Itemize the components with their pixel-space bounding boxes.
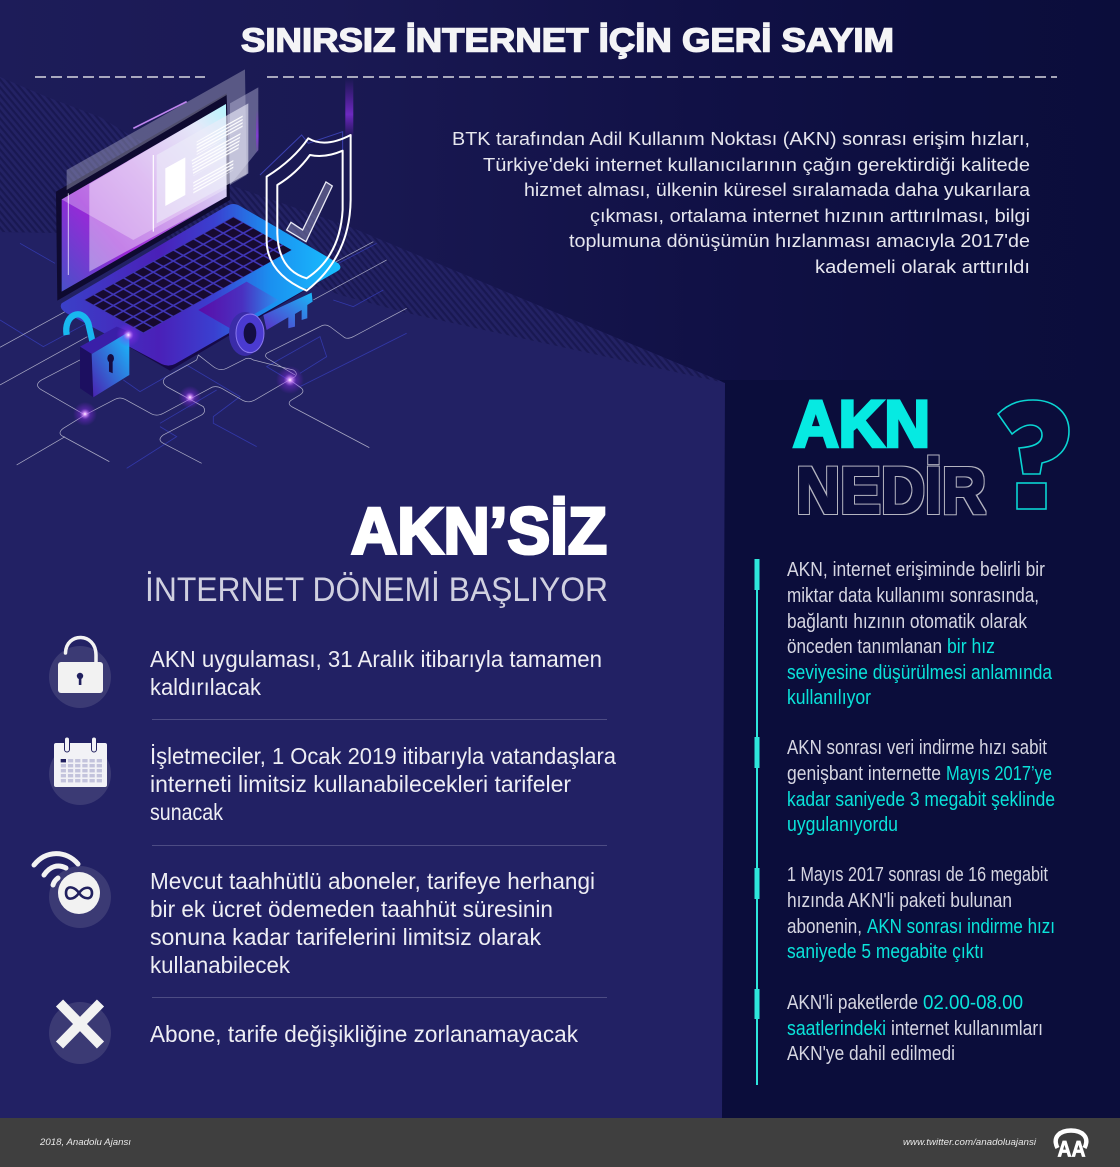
list item 1: kaldırılacak [150, 674, 261, 700]
text block: definition: bir hız [947, 636, 995, 658]
icon: padlock [49, 637, 111, 708]
heading: AKN'siz [145, 494, 608, 609]
intro paragraph: kademeli olarak arttırıldı [815, 256, 1030, 277]
list item 2 [150, 743, 616, 825]
icon: wifi with infinity [34, 854, 111, 928]
shield [260, 78, 353, 291]
list item 2: interneti limitsiz kullanabilecekleri tarifeler [150, 771, 571, 797]
footer bar: www.twitter.com/anadoluajansi [903, 1137, 1037, 1148]
footer bar [0, 1118, 1120, 1167]
list item 3: Mevcut taahhütlü aboneler, tarifeye herhangi [150, 868, 595, 894]
heading: AKN nedir: NEDİR [796, 453, 986, 527]
text block: definition: AKN, internet erişiminde belirli bir [787, 559, 1045, 581]
footer bar: 2018, Anadolu Ajansı [39, 1137, 131, 1148]
list item 3: sonuna kadar tarifelerini limitsiz olarak [150, 924, 541, 950]
text block: definition: kullanılıyor [787, 687, 871, 709]
key [229, 293, 313, 356]
laptop base [61, 207, 338, 371]
title: SINIRSIZ İNTERNET İÇİN GERİ SAYIM [241, 22, 894, 58]
padlock [66, 314, 129, 397]
text block: 16 megabit: 1 Mayıs 2017 sonrası de 16 megabit [787, 864, 1048, 886]
icon: question mark [998, 400, 1069, 509]
text block: definition: önceden tanımlanan [787, 636, 942, 658]
logo: Anadolu Agency: AA [1058, 1136, 1086, 1162]
list item 3: bir ek ücret ödemeden taahhüt süresinin [150, 896, 553, 922]
text block: definition: bağlantı hızının otomatik olarak [787, 611, 1028, 633]
text block: night hours: 02.00-08.00 [923, 992, 1023, 1014]
text block: definition: seviyesine düşürülmesi anlamında [787, 662, 1053, 684]
light glows [73, 110, 304, 426]
heading: AKN'siz: AKN’SİZ [351, 494, 607, 568]
text block: night hours: AKN'li paketlerde [787, 992, 918, 1014]
intro paragraph: Türkiye'deki internet kullanıcılarının çağın gerektirdiği kalitede [483, 154, 1030, 175]
text block: night hours: internet kullanımları [891, 1018, 1043, 1040]
heading: AKN nedir: AKN [793, 386, 930, 460]
text block: May 2017 speed [787, 737, 1055, 836]
text block: night hours: AKN'ye dahil edilmedi [787, 1043, 955, 1065]
screen [56, 93, 230, 301]
text block: 16 megabit: AKN sonrası indirme hızı [867, 916, 1055, 938]
text block: 16 megabit: hızında AKN'li paketi bulunan [787, 890, 1012, 912]
intro paragraph [452, 128, 1031, 277]
intro paragraph: BTK tarafından Adil Kullanım Noktası (AKN) sonrası erişim hızları, [452, 128, 1030, 149]
text block: night hours: saatlerindeki [787, 1018, 886, 1040]
illustration: isometric laptop with shield, key and lock [0, 69, 407, 468]
text block: 16 megabit: abonenin, [787, 916, 862, 938]
keyboard [83, 217, 292, 333]
text block: May 2017 speed: kadar saniyede 3 megabit şeklinde [787, 789, 1055, 811]
icon: calendar [49, 737, 111, 805]
intro paragraph: hizmet alması, ülkenin küresel sıralamada daha yukarılara [524, 179, 1031, 200]
circuit lines [0, 242, 407, 468]
heading: AKN'siz: İNTERNET DÖNEMİ BAŞLIYOR [145, 571, 608, 609]
list item 1 [150, 646, 602, 700]
icon: cross [49, 1002, 111, 1064]
intro paragraph: çıkması, ortalama internet hızının arttırılması, bilgi [590, 205, 1030, 226]
trackpad [198, 282, 278, 328]
panel: left section background [0, 77, 725, 1118]
timeline [754, 559, 760, 1085]
list item 1: AKN uygulaması, 31 Aralık itibarıyla tamamen [150, 646, 602, 672]
text block: May 2017 speed: AKN sonrası veri indirme hızı sabit [787, 737, 1047, 759]
list item 2: sunacak [150, 799, 223, 825]
text block: May 2017 speed: Mayıs 2017’ye [946, 763, 1052, 785]
text block: May 2017 speed: genişbant internette [787, 763, 941, 785]
list item 3: kullanabilecek [150, 952, 290, 978]
text block: 16 megabit: saniyede 5 megabite çıktı [787, 941, 984, 963]
text block: 16 megabit [787, 864, 1055, 963]
text block: May 2017 speed: uygulanıyordu [787, 814, 898, 836]
list item 4: Abone, tarife değişikliğine zorlanamayacak [150, 1021, 578, 1047]
heading: AKN nedir [793, 386, 986, 527]
list item 2: İşletmeciler, 1 Ocak 2019 itibarıyla vatandaşlara [150, 743, 616, 769]
text block: definition: miktar data kullanımı sonrasında, [787, 585, 1039, 607]
text block: definition [787, 559, 1053, 709]
list item 3 [150, 868, 595, 978]
text block: night hours [787, 992, 1043, 1065]
intro paragraph: toplumuna dönüşümün hızlanması amacıyla 2017'de [569, 230, 1030, 251]
